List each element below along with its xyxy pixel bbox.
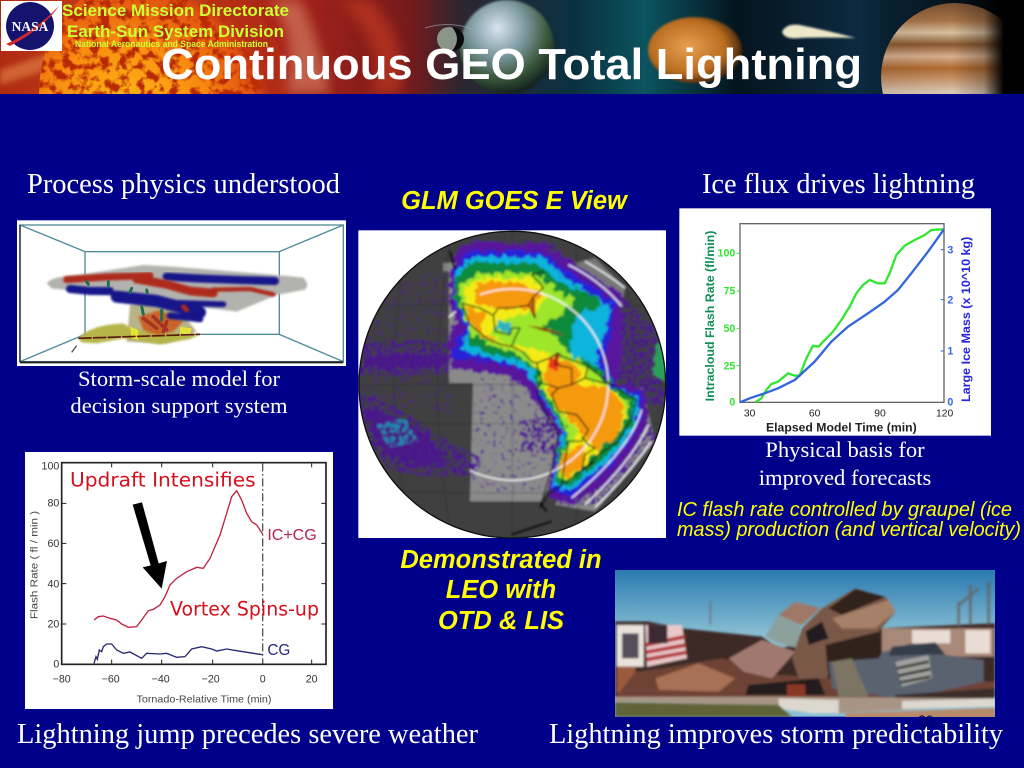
debris pile [615,658,995,698]
left axis ticks: 25 [723,360,735,372]
panel: tornado damage photo [615,570,995,718]
callout: demonstrated in LEO [400,546,602,635]
label: updraft intensifies: Updraft Intensifies [70,469,256,492]
heading: lightning jump: Lightning jump precedes severe weather [17,718,478,750]
heading: ice flux: Ice flux drives lightning [702,168,975,200]
header org text: National Aeronautics and Space Administration [75,39,268,49]
left axis ticks: 75 [723,285,735,297]
y axis ticks: 100 [42,460,59,472]
y axis ticks: 20 [47,619,59,631]
x axis ticks: 120 [936,409,954,420]
caption: physical basis: improved forecasts [759,465,931,490]
x axis ticks: −80 [53,674,71,686]
y axis ticks: 60 [47,538,59,550]
label: CG: CG [267,642,290,659]
storm anvil [47,265,307,312]
x axis title: Tornado-Relative Time (min) [136,695,271,706]
blue ice mass line [740,229,944,402]
overturned truck [729,640,795,678]
x axis ticks: 90 [874,409,886,420]
caption: storm-scale model: decision support system [70,393,288,418]
y axis title: Flash Rate ( fl / min ) [30,511,41,619]
green flash rate line [755,229,943,402]
heading: process physics: Process physics understood [27,168,340,200]
callout: demonstrated in LEO: OTD & LIS [438,607,564,635]
purple ocean bands [365,354,448,465]
NASA logo [1,1,62,51]
caption: physical basis: Physical basis for [765,437,925,462]
icon: jupiter [881,3,1003,94]
x axis title: Elapsed Model Time (min) [766,422,917,435]
icon: sun [39,0,287,94]
plot frame [62,463,326,664]
x axis ticks: 30 [744,409,756,420]
right axis ticks: 0 [947,397,953,409]
left axis ticks [718,248,735,409]
lighter swath blocks [568,258,625,306]
right axis ticks [947,244,953,409]
y axis ticks [42,460,59,671]
panel: GLM globe [355,228,670,541]
callout: demonstrated in LEO: LEO with [446,576,556,604]
white wall [617,625,644,667]
red charge layer [67,276,273,310]
lightning climatology contours [448,241,648,505]
label: IC+CG: IC+CG [267,527,317,544]
x axis ticks [744,409,954,420]
storm core [127,302,197,343]
note: IC flash rate: mass) production (and vertical velocity) [677,519,1021,541]
header banner [0,0,1024,94]
plot frame [740,224,944,402]
IC+CG line [94,491,263,627]
y axis ticks: 0 [53,659,59,671]
jupiter shadow [880,0,1024,94]
panel: flash rate chart [25,452,333,709]
right axis ticks: 2 [947,294,953,306]
ground rubble [615,697,995,713]
x axis ticks: −20 [202,674,220,686]
x axis ticks: −40 [152,674,170,686]
purple ocean speckle: dense [359,241,666,505]
y axis ticks: 40 [47,578,59,590]
x axis ticks: 60 [809,409,821,420]
x axis ticks: −60 [102,674,120,686]
caption: storm-scale model [70,366,288,418]
left axis ticks: 100 [718,248,735,260]
heading: storm predictability: Lightning improves storm predictability [549,718,1003,750]
globe base [355,228,670,541]
y axis ticks: 80 [47,498,59,510]
blue pickup truck [829,643,984,698]
callout: demonstrated in LEO: Demonstrated in [400,546,602,574]
arrow: updraft to flash rate [133,502,167,589]
title: Continuous GEO Total Lightning [161,40,862,89]
swath arcs [449,261,651,507]
icon: earth [460,0,554,94]
tornado time marker [261,463,265,663]
note: IC flash rate [677,499,1021,541]
page number: 20 [918,712,934,728]
blue charge layer [70,277,275,319]
right axis ticks: 3 [947,244,953,256]
panel: ice flux chart [679,208,991,436]
left axis ticks: 0 [729,397,735,409]
american flag [645,625,687,667]
background buildings [615,622,995,702]
icon: moon with ring [425,24,475,51]
grid lines [398,262,652,509]
x axis ticks [53,674,318,686]
NASA logo: NASA [12,19,49,34]
CG line [94,644,263,663]
right axis ticks: 1 [947,346,953,358]
heading: GLM view: GLM GOES E View [401,187,629,215]
storm base [78,323,200,344]
icon: comet [782,25,856,38]
x axis ticks: 20 [306,674,318,686]
header org text [62,2,289,49]
icon: orange planet [648,17,742,83]
caption: storm-scale model: Storm-scale model for [78,366,280,391]
purple ocean speckle: sparse [360,271,562,491]
label: vortex spins-up: Vortex Spins-up [170,597,319,620]
note: IC flash rate: IC flash rate controlled by graupel (ice [677,499,1012,521]
left axis ticks: 50 [723,323,735,335]
panel: storm-scale model [17,220,346,366]
x axis ticks: 0 [260,674,266,686]
caption: physical basis [759,437,931,490]
header org text: Earth-Sun System Division [67,22,284,41]
orange charge region [138,310,183,335]
header org text: Science Mission Directorate [62,2,289,20]
coastlines and borders [462,271,637,508]
left axis title: Intracloud Flash Rate (fl/min) [704,231,717,401]
right axis title: Large Ice Mass (x 10^10 kg) [960,237,973,402]
cyan ocean patch [377,418,418,448]
